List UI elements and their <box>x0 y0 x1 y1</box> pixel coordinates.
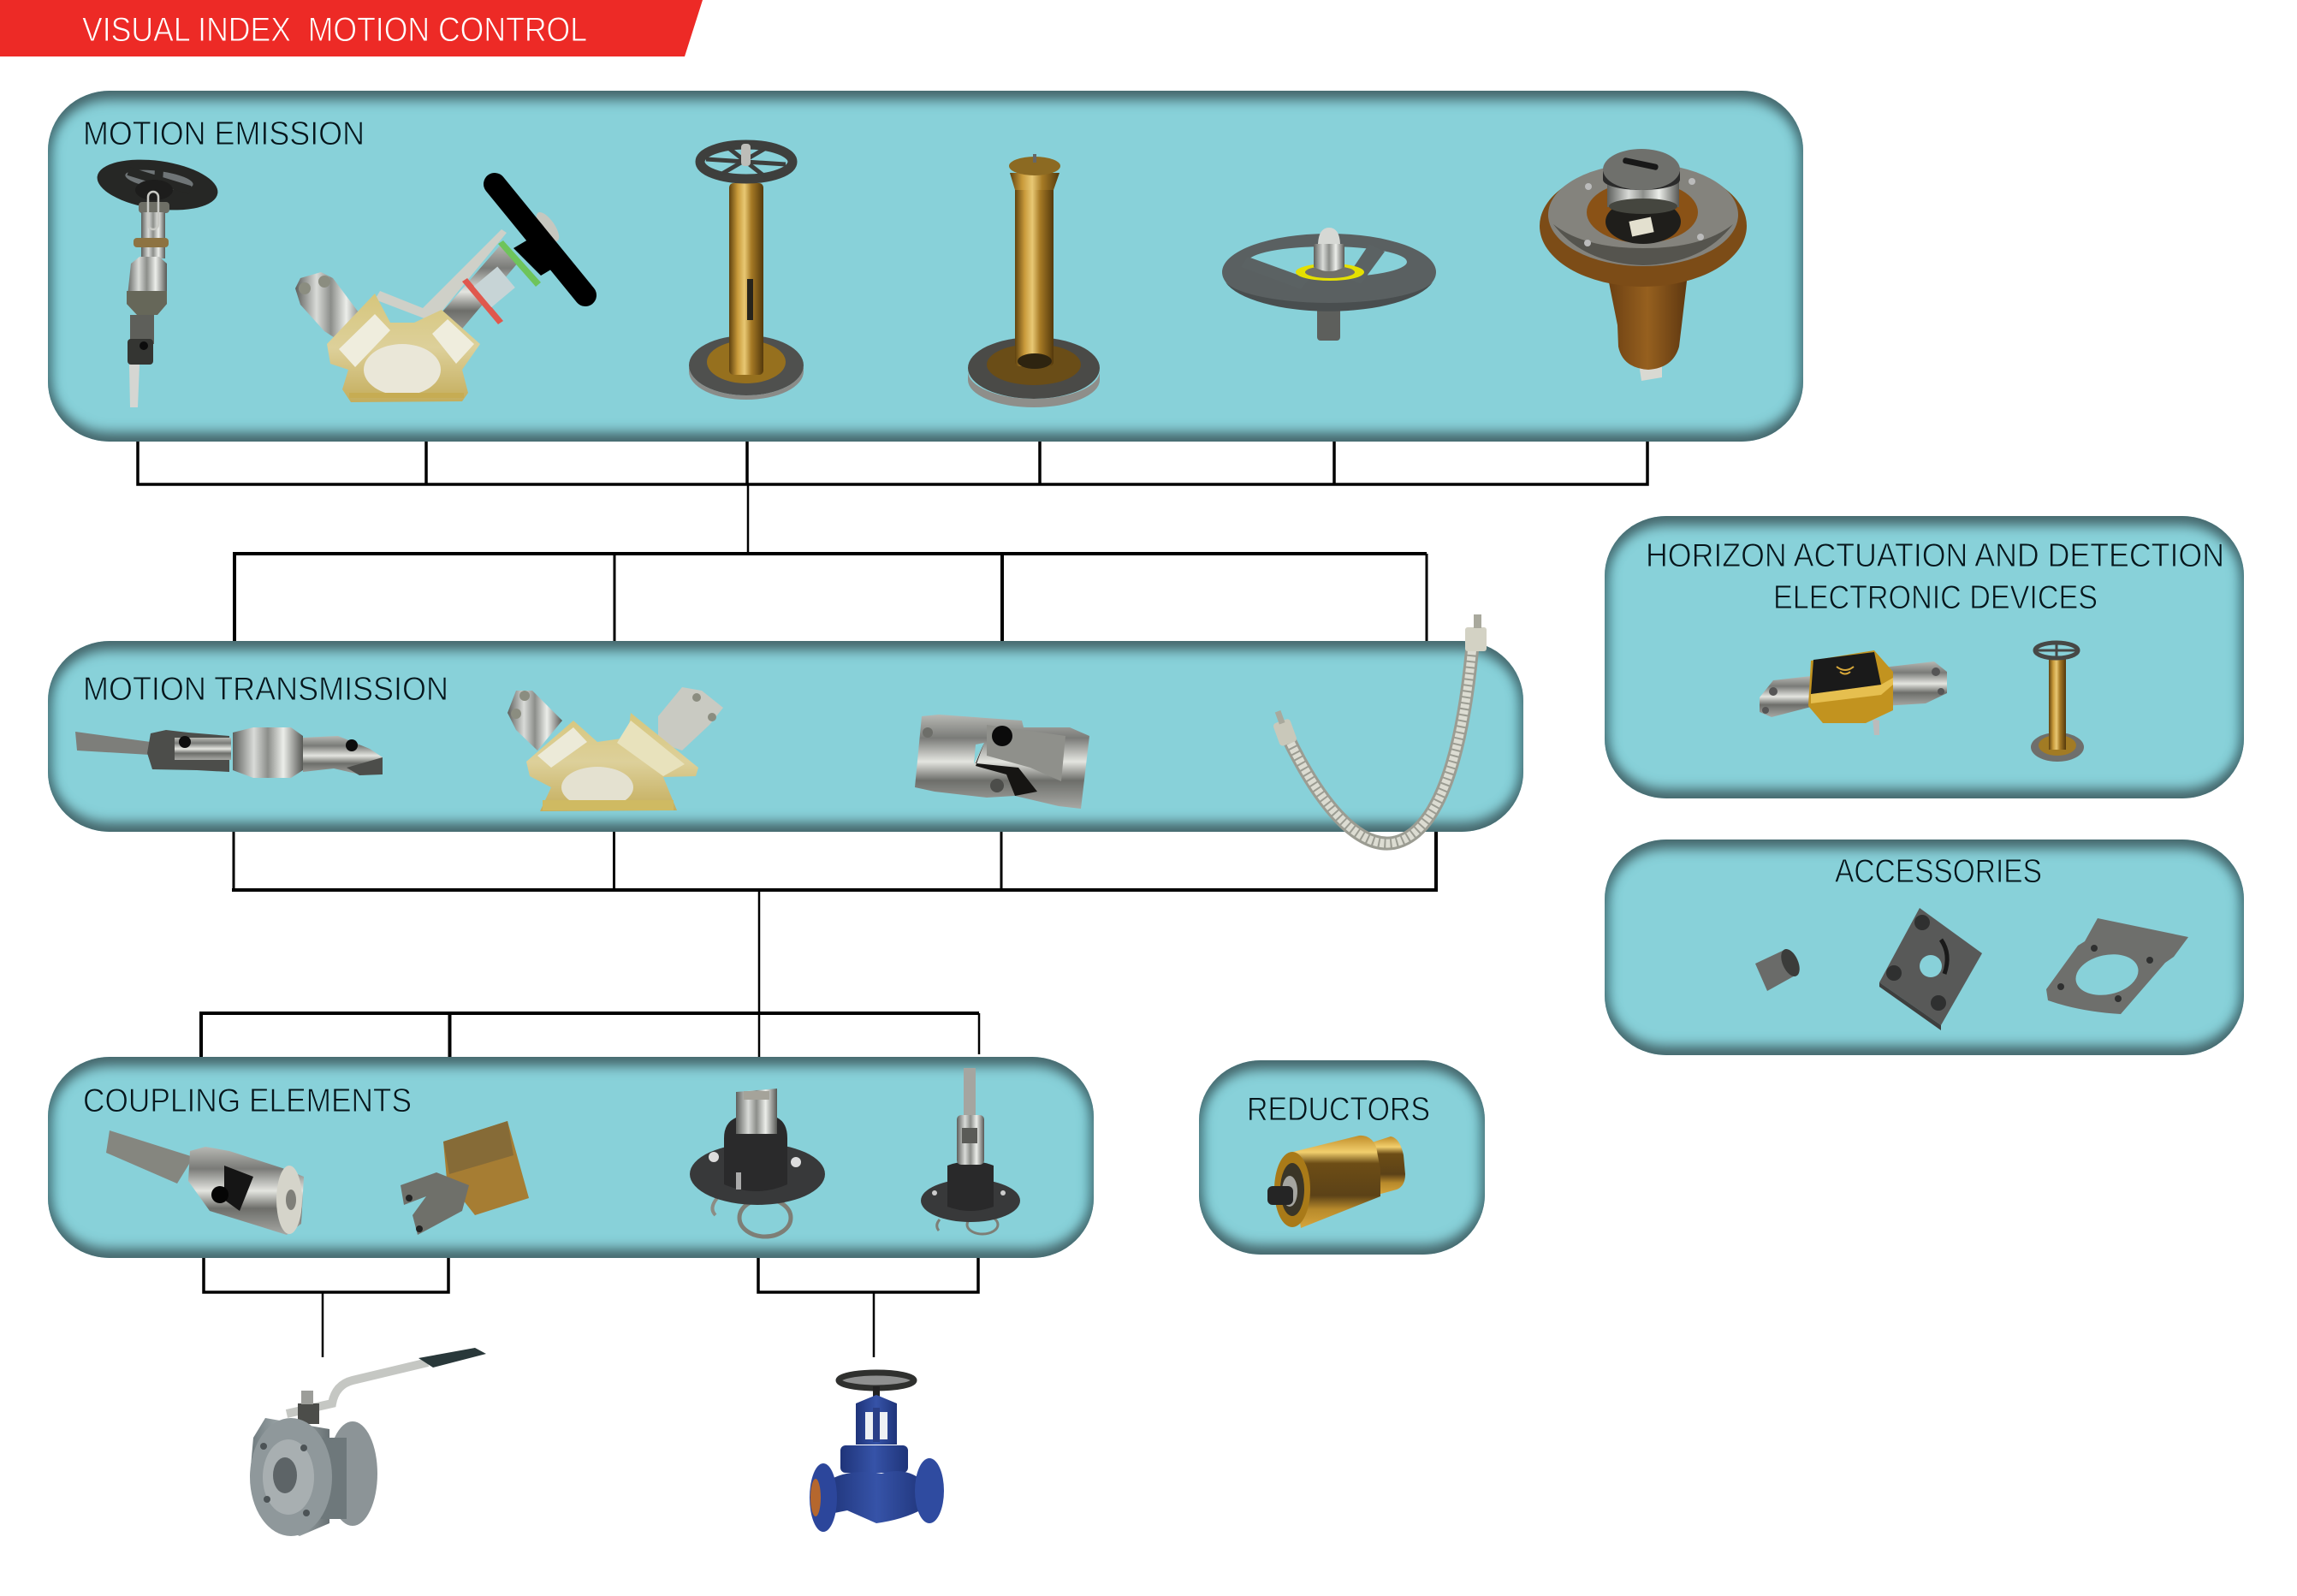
icon: mini gold column <box>2031 643 2084 762</box>
icon: double universal joint shaft <box>75 727 383 778</box>
icon: ball valve with lever <box>250 1348 486 1536</box>
icon: gold column <box>968 154 1100 407</box>
icon: brass yoke <box>507 687 723 811</box>
icon: blue globe valve with handwheel <box>810 1373 944 1532</box>
heading: coupling elements: COUPLING ELEMENTS <box>83 1083 412 1119</box>
heading: horizon actuation and detection electronic devices: HORIZON ACTUATION AND DETECTION <box>1646 537 2224 574</box>
heading: motion emission: MOTION EMISSION <box>83 116 365 152</box>
panel: motion transmission <box>48 641 1523 832</box>
icon: brass yoke with black handwheel <box>295 184 585 402</box>
heading: motion transmission: MOTION TRANSMISSION <box>83 671 448 708</box>
panel: accessories <box>1605 840 2244 1055</box>
icon: gold wireless sensor on shaft <box>1760 650 1947 735</box>
heading: accessories: ACCESSORIES <box>1835 853 2042 890</box>
heading: horizon actuation and detection electronic devices: ELECTRONIC DEVICES <box>1773 579 2098 616</box>
icon: braided flexible hose <box>1273 614 1487 844</box>
icon: brown flange with cap <box>1540 149 1747 381</box>
icon: cut-out bracket plate <box>2046 918 2188 1014</box>
icon: flange with universal joint <box>921 1068 1020 1234</box>
icon: grey handwheel <box>1222 228 1436 341</box>
icon: universal joint <box>915 715 1089 809</box>
heading: reductors: REDUCTORS <box>1247 1091 1430 1128</box>
icon: flange with square tube <box>690 1089 825 1237</box>
icon: small cylinder <box>1755 946 1803 991</box>
icon: handwheel stem assembly <box>94 152 221 407</box>
panel: reductors <box>1199 1060 1485 1255</box>
icon: gold coupler with fork <box>401 1121 529 1235</box>
icon: gold column with handwheel <box>689 144 804 400</box>
icon: square mounting plate <box>1879 908 1982 1030</box>
icon: gold reducer <box>1267 1136 1405 1228</box>
panel: coupling elements <box>48 1057 1094 1258</box>
heading: horizon actuation and detection electronic devices <box>1646 537 2224 616</box>
panel: motion emission <box>48 91 1803 442</box>
banner: visual index motion control: VISUAL INDEX MOTION CONTROL <box>82 11 587 49</box>
banner: visual index motion control <box>0 0 703 56</box>
icon: universal joint with shaft <box>106 1130 304 1235</box>
panel: horizon actuation and detection electronic devices <box>1605 516 2244 798</box>
